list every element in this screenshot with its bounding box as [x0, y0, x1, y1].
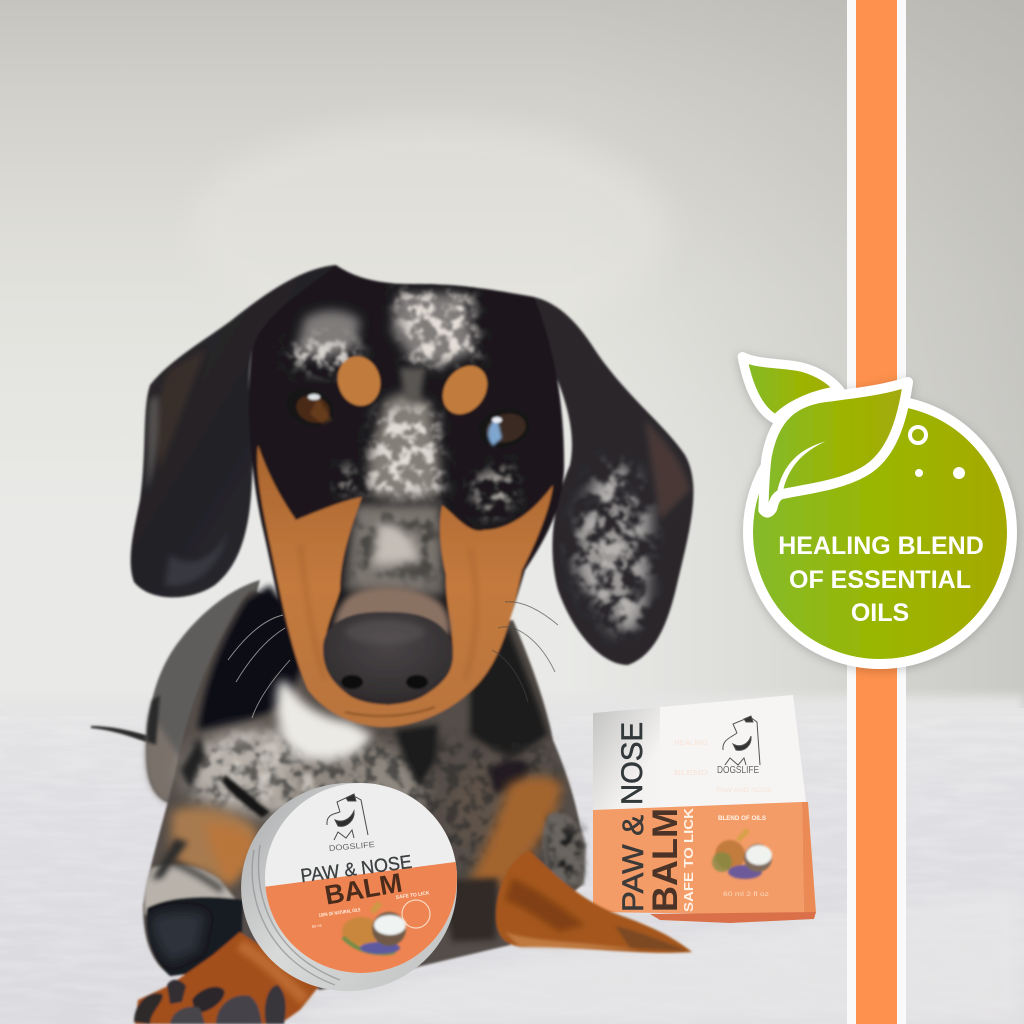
right leg streaks: [505, 878, 585, 932]
bubble ring: [910, 427, 926, 443]
eye right: [474, 403, 534, 453]
balm tin: [241, 782, 457, 991]
box text: SAFE TO LICK: SAFE TO LICK: [681, 807, 696, 912]
badge text: HEALING BLEND: [778, 532, 984, 560]
torso merle mottling: [190, 735, 575, 880]
left front paw: [135, 932, 320, 1024]
badge text: OILS: [851, 599, 909, 627]
tin lid face: [265, 783, 457, 973]
nose bridge grey: [368, 392, 440, 500]
box bottom edge: [650, 912, 816, 923]
tan brow right: [434, 357, 496, 423]
left ear sheen: [157, 350, 205, 470]
tin body: [228, 769, 470, 1005]
mouth: [345, 707, 435, 716]
whiskers left: [228, 615, 290, 718]
product box: PAW AND NOSE: [716, 788, 772, 794]
rear body: [146, 580, 260, 803]
front leg grey band: [144, 864, 240, 915]
lid logo: [327, 794, 368, 840]
badge text: [778, 532, 984, 627]
tan brow left: [332, 351, 386, 411]
whiskers right: [492, 602, 558, 702]
box essential oils text: BLEND OF OILS: [718, 816, 766, 822]
lid orange label: [266, 862, 457, 973]
badge circle: [748, 400, 1012, 664]
eye left: [281, 382, 339, 432]
lid brand name: DOGSLIFE: [328, 840, 375, 853]
left ear: [131, 265, 336, 597]
cheek mottling: [472, 465, 518, 520]
badge text: OF ESSENTIAL: [789, 566, 971, 594]
torso chest light fur: [183, 730, 327, 814]
background wall: [0, 0, 1024, 730]
product box: PAW &: [617, 815, 650, 912]
lid seal icon: [402, 900, 430, 928]
box volume text: 60 ml 2 fl oz: [723, 892, 769, 898]
nostrils: [341, 675, 428, 689]
badge: [742, 357, 1012, 664]
forehead grey patches: [392, 294, 474, 366]
box side face: [802, 802, 816, 916]
lid small claim right: SAFE TO LICK: [395, 890, 430, 901]
product box: BLEND: [674, 770, 708, 777]
box brand name: DOGSLIFE: [717, 765, 759, 776]
back leaf: [742, 357, 840, 419]
front leg black: [146, 897, 243, 976]
front leaf: [763, 382, 908, 513]
dark under-lid belly: [440, 878, 498, 942]
tin grooves: [252, 845, 340, 985]
nose top brown: [335, 587, 450, 640]
right front leg: [496, 850, 692, 953]
box logo: [723, 716, 760, 765]
box illustration: [712, 830, 772, 879]
nose: [323, 612, 453, 705]
lid illustration: [342, 903, 406, 954]
torso upper black: [198, 585, 310, 730]
right flank: [542, 812, 586, 885]
right ear: [534, 297, 693, 665]
leaf vein: [777, 441, 826, 494]
paw toes and claws: [134, 980, 286, 1024]
chest tan shoulder: [170, 807, 258, 885]
product box: [593, 695, 816, 923]
bubble dot large: [953, 467, 965, 479]
tan muzzle: [257, 445, 553, 727]
black chest splotches: [395, 724, 438, 788]
lid small claim left: 100% OF NATURAL OILS: [318, 907, 361, 919]
box orange lower panel: [593, 802, 804, 915]
lid title: PAW & NOSE: PAW & NOSE: [299, 852, 413, 887]
blanket: [0, 696, 1024, 1024]
lid volume: 60 ml: [311, 923, 322, 929]
body torso: [143, 590, 584, 990]
box white top panel: [593, 695, 806, 810]
tail: [91, 727, 149, 742]
dachshund dog: [91, 265, 693, 1024]
muzzle fur streaks: [300, 545, 476, 680]
right ear merle: [574, 464, 650, 632]
box faint label: HEALING: [674, 740, 708, 747]
nose highlight: [345, 620, 425, 644]
vertical orange stripe: [847, 0, 906, 1024]
bubble dot small: [915, 469, 923, 477]
box text: PAW & NOSE: NOSE: [616, 722, 649, 805]
head base black: [249, 265, 564, 719]
box text: BALM: BALM: [646, 808, 685, 912]
lid title: BALM: BALM: [322, 868, 404, 911]
white chest: [277, 680, 372, 760]
